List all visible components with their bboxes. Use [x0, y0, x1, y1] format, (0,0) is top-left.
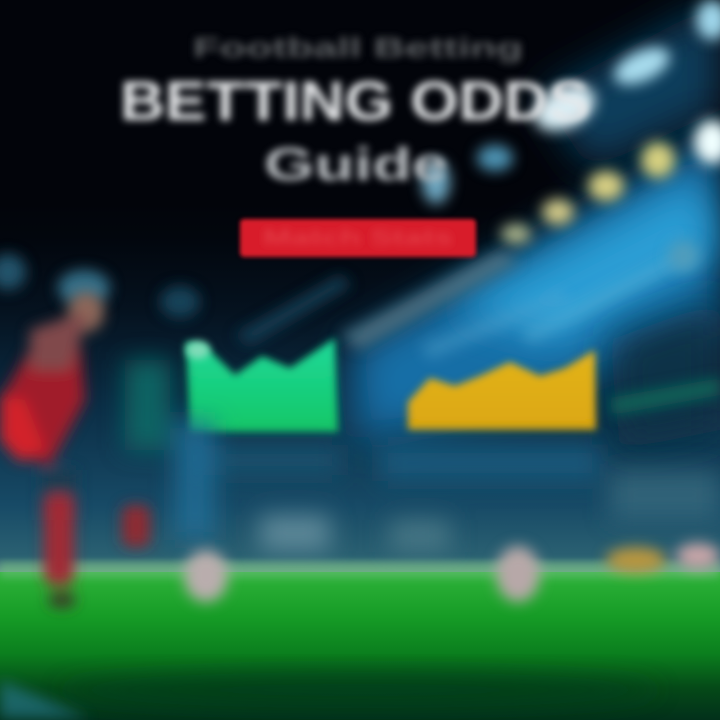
title: Football Betting	[193, 32, 523, 63]
stadium roof lights	[0, 0, 720, 318]
green area chart	[186, 338, 338, 432]
red banner	[240, 219, 476, 257]
red banner: Match Stats	[263, 225, 453, 250]
stadium light beam	[350, 0, 720, 450]
title: BETTING ODDS	[120, 69, 590, 132]
player	[0, 292, 104, 608]
pitch-side lights	[606, 543, 720, 573]
title	[120, 32, 590, 190]
pitch	[0, 562, 720, 720]
lower stand rows	[125, 360, 720, 552]
footballs	[184, 546, 540, 602]
gold area chart	[408, 350, 596, 430]
title: Guide	[264, 138, 448, 190]
diagonal light streak	[235, 250, 720, 415]
background player	[122, 505, 150, 547]
